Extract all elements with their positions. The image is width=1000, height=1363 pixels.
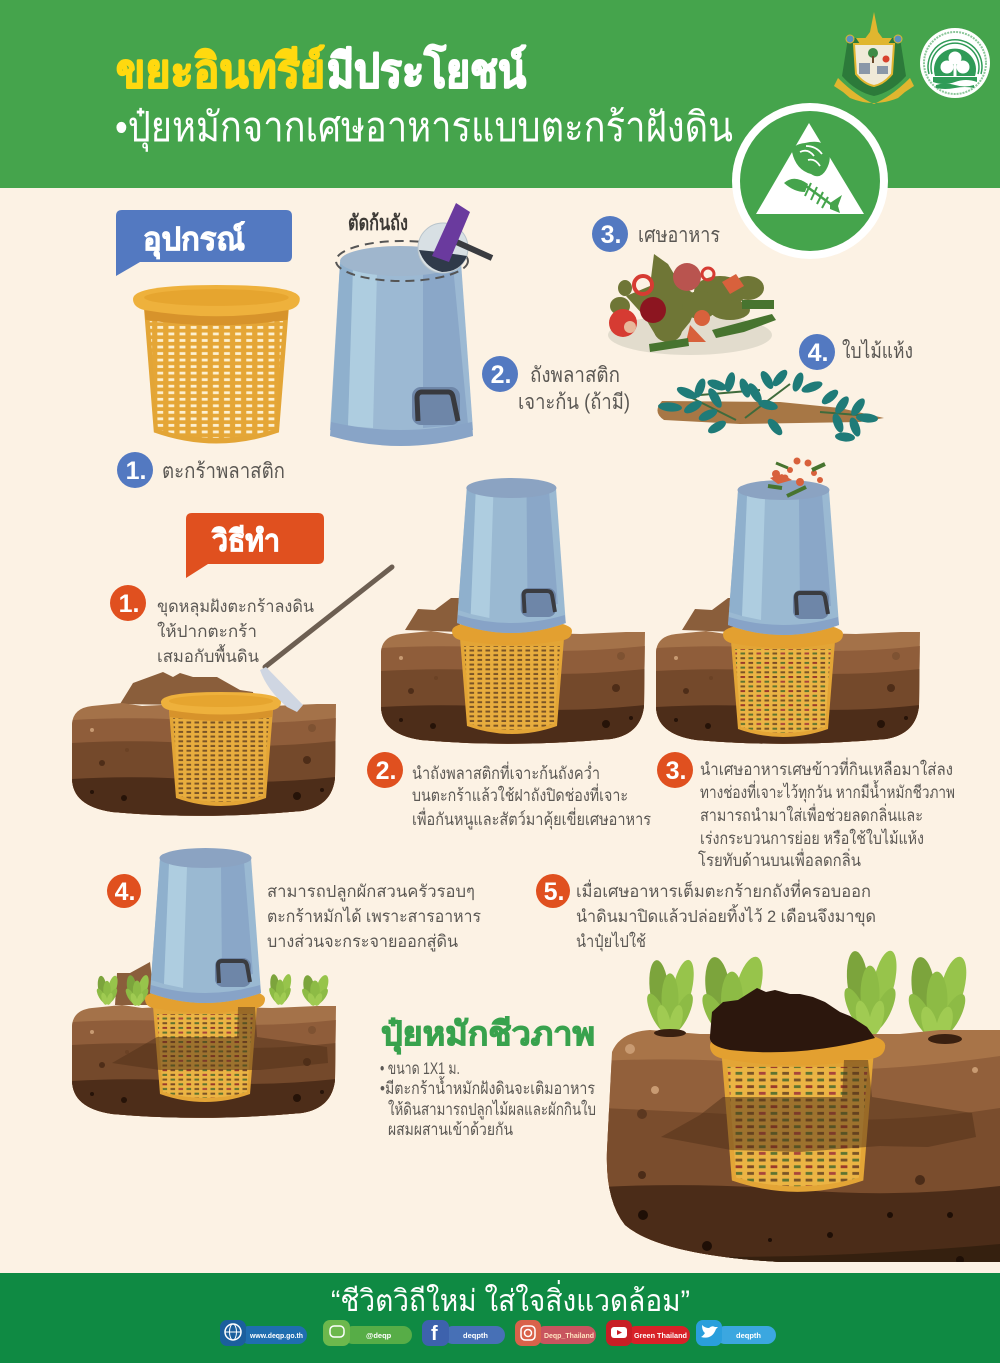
social: line — [323, 1320, 412, 1346]
tag: method — [186, 513, 324, 578]
step 3 text — [657, 752, 955, 870]
logo: ministry crest — [834, 12, 914, 104]
social: youtube — [606, 1320, 690, 1346]
tag: equipment: อุปกรณ์ — [143, 221, 245, 260]
item 2: plastic bucket with grinder: 2. — [491, 361, 511, 389]
step 3 text: เร่งกระบวนการย่อย หรือใช้ใบไม้แห้ง — [700, 828, 924, 848]
item 1: plastic basket: ตะกร้าพลาสติก — [162, 460, 285, 483]
slogan: “ชีวิตวิถีใหม่ ใส่ใจสิ่งแวดล้อม” — [331, 1280, 690, 1318]
social: facebook — [422, 1320, 505, 1346]
step 5 text — [536, 874, 876, 952]
step 2 text: เพื่อกันหนูและสัตว์มาคุ้ยเขี่ยเศษอาหาร — [412, 807, 651, 830]
title: ขยะอินทรีย์ — [116, 44, 325, 97]
logo: department emblem — [920, 28, 990, 98]
item 2: plastic bucket with grinder — [330, 203, 630, 446]
step 1 text: ขุดหลุมฝังตะกร้าลงดิน — [157, 597, 314, 617]
item 3: food scraps: 3. — [601, 221, 621, 249]
step 4 text: ตะกร้าหมักได้ เพราะสารอาหาร — [267, 906, 481, 926]
step 4 text: 4. — [115, 878, 135, 906]
step 2 text: 2. — [376, 757, 396, 785]
social: facebook: deqpth — [463, 1331, 488, 1340]
step 3 illustration: feeding scraps into bucket — [656, 458, 920, 748]
compost notes: •มีตะกร้าน้ำหมักฝังดินจะเติมอาหาร — [380, 1076, 595, 1098]
item 4: dry leaves: 4. — [808, 339, 828, 367]
item 4: dry leaves: ใบไม้แห้ง — [842, 339, 913, 363]
step 1 text — [110, 585, 314, 666]
step 2 text: นำถังพลาสติกที่เจาะก้นถังคว่ำ — [412, 761, 600, 783]
social: line: @deqp — [366, 1331, 392, 1340]
social: twitter — [696, 1320, 776, 1346]
finished compost illustration — [600, 948, 1000, 1270]
step 4 text — [107, 874, 481, 952]
step 4 text: สามารถปลูกผักสวนครัวรอบๆ — [267, 882, 475, 902]
step 1 illustration: basket in hole with hoe — [72, 567, 392, 820]
compost heading: ปุ๋ยหมักชีวภาพ — [381, 1015, 595, 1055]
item 2: plastic bucket with grinder: เจาะก้น (ถ้ามี) — [518, 391, 630, 414]
step 3 text: นำเศษอาหารเศษข้าวที่กินเหลือมาใส่ลง — [700, 757, 953, 779]
step 3 text: 3. — [666, 757, 686, 785]
item 1: plastic basket: 1. — [126, 457, 146, 485]
step 5 text: เมื่อเศษอาหารเต็มตะกร้ายกถังที่ครอบออก — [576, 879, 871, 901]
step 5 text: นำดินมาปิดแล้วปล่อยทิ้งไว้ 2 เดือนจึงมาขุด — [576, 904, 876, 927]
item 2: plastic bucket with grinder: ตัดก้นถัง — [348, 211, 408, 235]
social: instagram: Deqp_Thailand — [544, 1331, 594, 1340]
step 4 text: บางส่วนจะกระจายออกสู่ดิน — [267, 932, 458, 952]
social: website: www.deqp.go.th — [249, 1331, 303, 1340]
step 3 text: สามารถนำมาใส่เพื่อช่วยลดกลิ่นและ — [700, 803, 923, 825]
social: youtube: Green Thailand — [634, 1331, 687, 1340]
tag: equipment — [116, 210, 292, 276]
step 4 illustration: plants around bucket — [72, 848, 336, 1122]
step 2 text: บนตะกร้าแล้วใช้ฝาถังปิดช่องที่เจาะ — [412, 783, 628, 805]
step 1 text: เสมอกับพื้นดิน — [157, 644, 259, 666]
compost notes — [380, 1059, 596, 1139]
tag: method: วิธีทำ — [211, 525, 280, 558]
social: instagram — [515, 1320, 596, 1346]
item 3: food scraps: เศษอาหาร — [638, 224, 720, 247]
subtitle: •ปุ๋ยหมักจากเศษอาหารแบบตะกร้าฝังดิน — [115, 104, 733, 152]
title — [116, 43, 526, 97]
item 3: food scraps — [592, 216, 776, 355]
item 4: dry leaves — [657, 334, 913, 442]
step 3 text: โรยทับด้านบนเพื่อลดกลิ่น — [698, 848, 861, 870]
item 2: plastic bucket with grinder: ถังพลาสติก — [530, 364, 620, 387]
social: twitter: deqpth — [736, 1331, 761, 1340]
title: มีประโยชน์ — [327, 43, 526, 97]
icon: organic waste badge — [732, 103, 888, 259]
social: facebook: f — [431, 1323, 438, 1345]
social: website — [220, 1320, 307, 1346]
step 2 text — [367, 752, 651, 830]
step 1 text: 1. — [119, 590, 139, 618]
item 1: plastic basket — [117, 285, 300, 488]
fish skeleton — [784, 179, 842, 213]
step 2 illustration: inverted bucket on basket — [381, 478, 645, 748]
compost notes: ผสมผสานเข้าด้วยกัน — [388, 1120, 513, 1139]
compost notes: ให้ดินสามารถปลูกไม้ผลและผักกินใบ — [388, 1099, 596, 1120]
step 5 text: 5. — [544, 878, 564, 906]
header band — [0, 0, 1000, 188]
compost notes: • ขนาด 1X1 ม. — [380, 1059, 460, 1078]
step 1 text: ให้ปากตะกร้า — [157, 621, 257, 641]
footer band — [0, 1273, 1000, 1363]
lettuce — [792, 142, 830, 176]
step 5 text: นำปุ๋ยไปใช้ — [576, 931, 646, 952]
